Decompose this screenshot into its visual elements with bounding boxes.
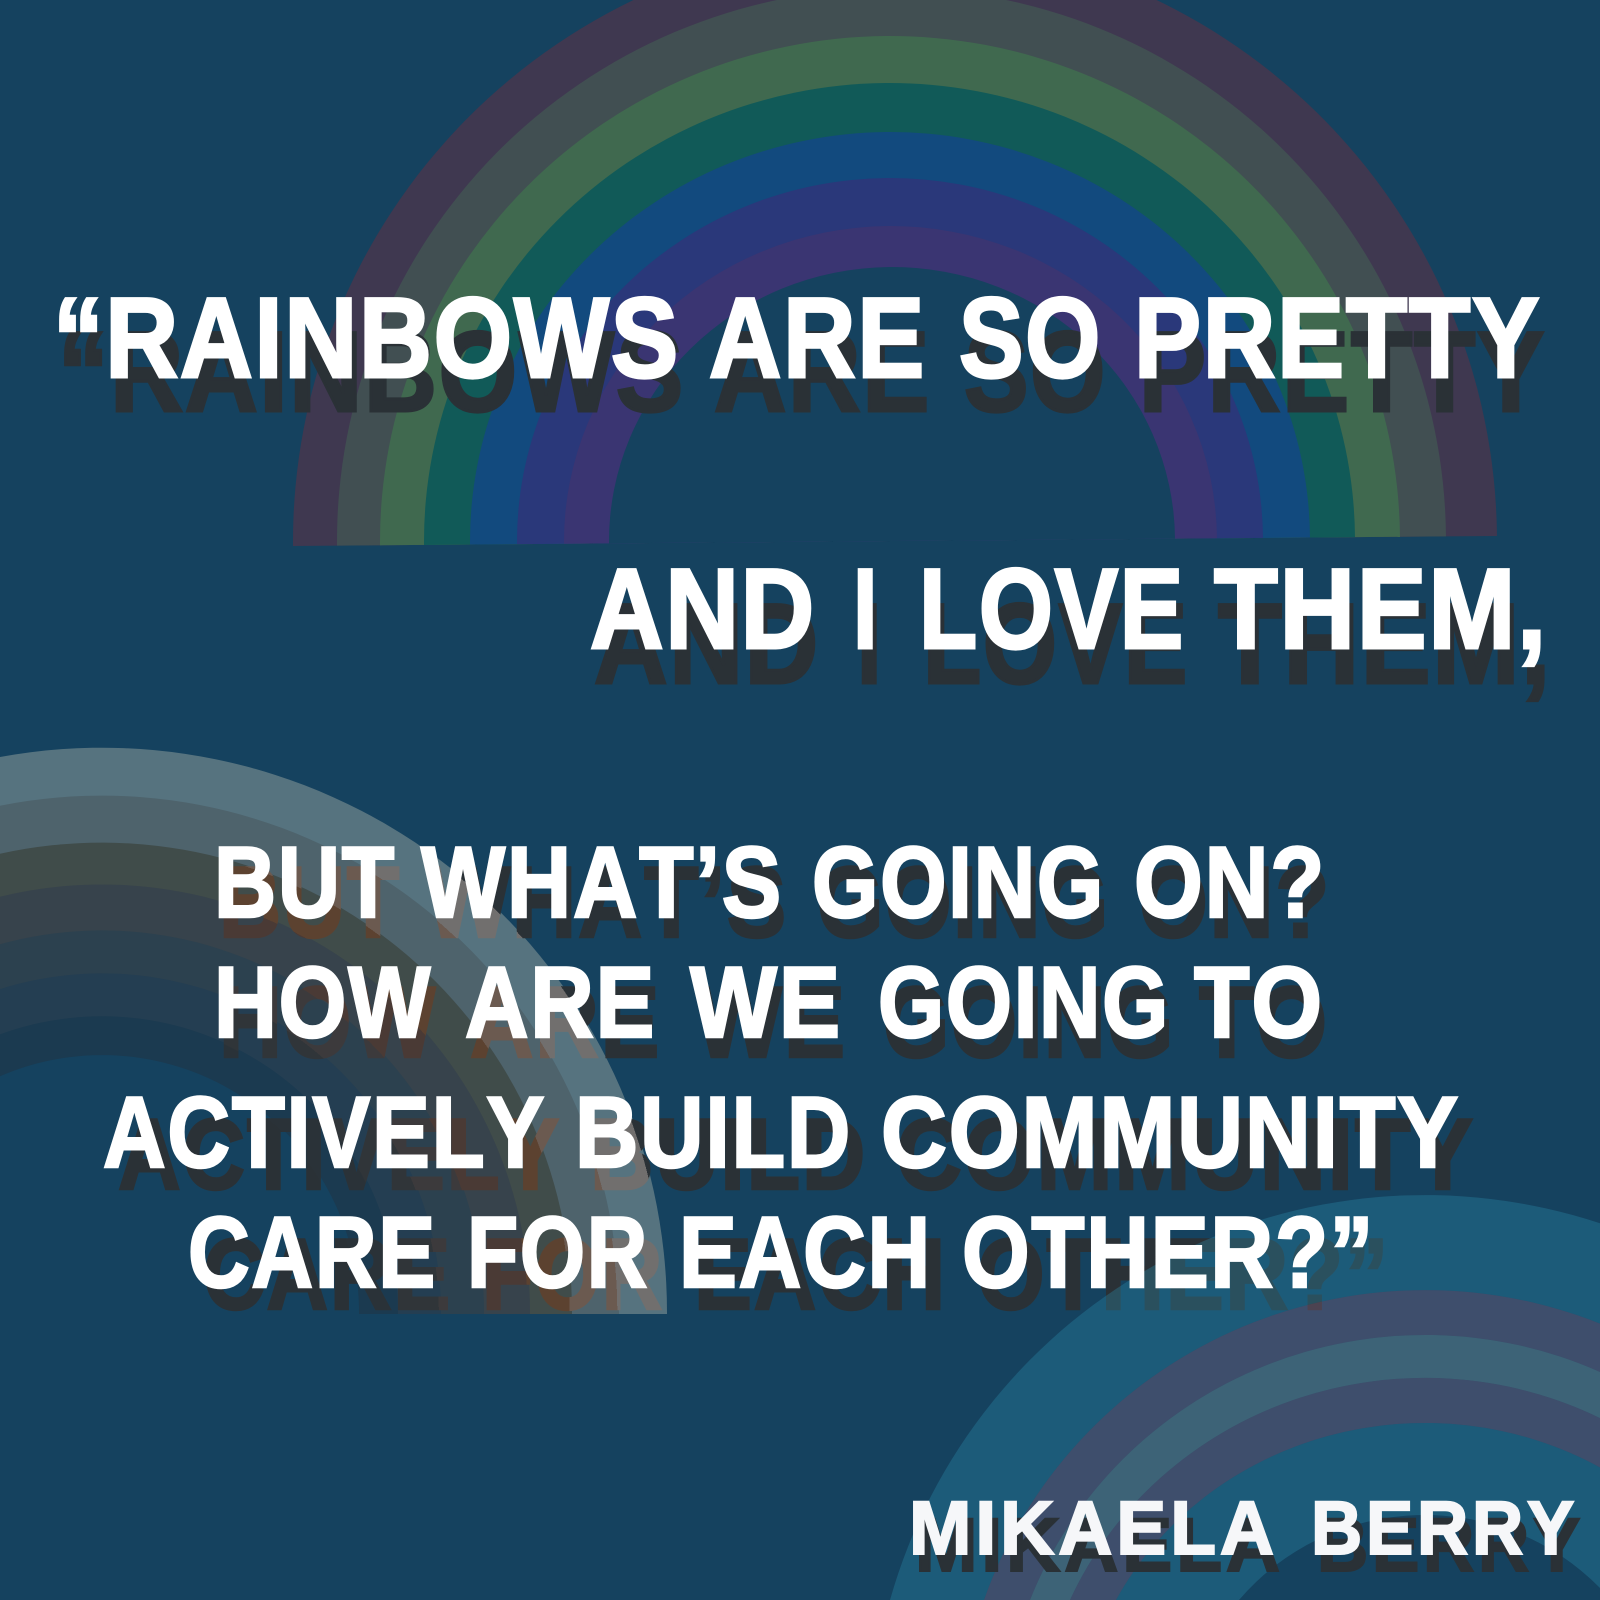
attribution <box>909 1486 1578 1571</box>
quote text <box>53 275 1548 1309</box>
quote drop shadow: BUILD <box>590 1099 867 1211</box>
quote drop shadow: I <box>857 581 883 708</box>
line 3 <box>214 827 1326 939</box>
line 4: TO <box>1194 947 1324 1059</box>
quote drop shadow: THEM, <box>1218 581 1552 708</box>
line 1: ARE <box>709 275 926 402</box>
quote drop shadow: SO <box>964 309 1107 436</box>
quote drop shadow: TO <box>1199 967 1329 1079</box>
quote drop shadow: GOING <box>883 967 1175 1079</box>
faded rainbow, lower left <box>0 748 667 1314</box>
line 4 <box>214 947 1324 1059</box>
attribution: MIKAELA <box>909 1486 1278 1571</box>
line 6 <box>188 1197 1375 1309</box>
translucent rainbow, lower right <box>890 1195 1600 1600</box>
line 1: SO <box>959 275 1102 402</box>
attribution: BERRY <box>1311 1486 1578 1571</box>
line 4: GOING <box>878 947 1170 1059</box>
quote drop shadow <box>58 309 1552 1331</box>
line 2: I <box>853 546 879 673</box>
quote drop shadow: COMMUNITY <box>896 1099 1475 1211</box>
attribution shadow <box>915 1503 1584 1588</box>
line 5 <box>103 1077 1460 1189</box>
line 6: CARE <box>188 1197 437 1309</box>
quote drop shadow: ON? <box>1139 847 1331 959</box>
main rainbow, top centre <box>288 0 1497 546</box>
quote drop shadow: AND <box>594 581 820 708</box>
line 6: OTHER?” <box>962 1197 1375 1309</box>
line 4: HOW <box>214 947 432 1059</box>
line 6: EACH <box>679 1197 932 1309</box>
quote drop shadow: GOING <box>817 847 1110 959</box>
quote drop shadow: HOW <box>219 967 437 1079</box>
quote drop shadow: CARE <box>203 1219 452 1331</box>
line 5: COMMUNITY <box>881 1077 1460 1189</box>
quote drop shadow: “RAINBOWS <box>58 309 685 436</box>
quote drop shadow: BUT <box>219 847 401 959</box>
quote drop shadow: ARE <box>714 309 931 436</box>
line 1: “RAINBOWS <box>53 275 680 402</box>
line 3: WHAT’S <box>421 827 783 939</box>
quote drop shadow: WE <box>695 967 847 1079</box>
quote drop shadow: OTHER?” <box>977 1219 1390 1331</box>
line 6: FOR <box>467 1197 649 1309</box>
quote drop shadow: LOVE <box>923 581 1189 708</box>
quote drop shadow: PRETTY <box>1139 309 1546 436</box>
attribution shadow: BERRY <box>1317 1503 1584 1588</box>
quote drop shadow: ARE <box>470 967 661 1079</box>
line 4: ARE <box>465 947 656 1059</box>
quote drop shadow: FOR <box>482 1219 664 1331</box>
line 2 <box>590 546 1548 673</box>
attribution shadow: MIKAELA <box>915 1503 1284 1588</box>
line 5: ACTIVELY <box>103 1077 546 1189</box>
line 3: ON? <box>1134 827 1326 939</box>
line 1: PRETTY <box>1134 275 1541 402</box>
line 2: THEM, <box>1214 546 1548 673</box>
quote drop shadow: WHAT’S <box>426 847 788 959</box>
quote drop shadow: EACH <box>694 1219 947 1331</box>
line 1 <box>53 275 1541 402</box>
line 2: AND <box>590 546 816 673</box>
line 4: WE <box>690 947 842 1059</box>
line 3: BUT <box>214 827 396 939</box>
line 5: BUILD <box>575 1077 852 1189</box>
quote drop shadow: ACTIVELY <box>118 1099 561 1211</box>
line 3: GOING <box>812 827 1105 939</box>
line 2: LOVE <box>919 546 1185 673</box>
